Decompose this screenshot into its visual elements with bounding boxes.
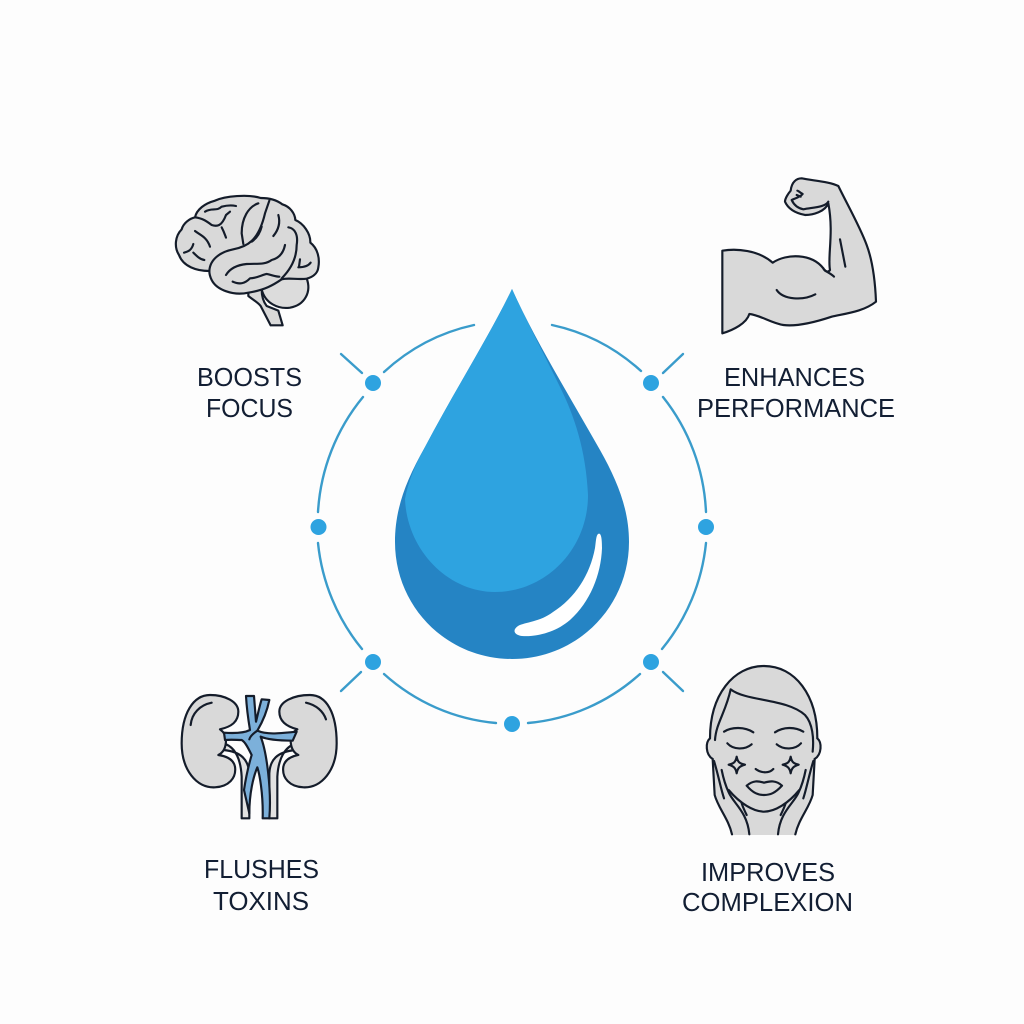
label: enhances performance: ENHANCES bbox=[724, 362, 865, 392]
label: boosts focus bbox=[197, 362, 302, 423]
label: improves complexion bbox=[682, 857, 853, 917]
icon: kidneys bbox=[182, 695, 337, 818]
icon: brain bbox=[176, 196, 319, 325]
label: flushes toxins bbox=[204, 854, 319, 916]
icon: water drop bbox=[395, 289, 629, 659]
label: enhances performance: PERFORMANCE bbox=[697, 393, 895, 423]
icon: flexed arm bbox=[722, 178, 876, 333]
label: improves complexion: IMPROVES bbox=[701, 857, 835, 887]
label: enhances performance bbox=[697, 362, 895, 423]
label: boosts focus: BOOSTS bbox=[197, 362, 302, 392]
icon: face with hands bbox=[707, 666, 821, 835]
label: flushes toxins: TOXINS bbox=[213, 886, 309, 916]
label: improves complexion: COMPLEXION bbox=[682, 887, 853, 917]
label: flushes toxins: FLUSHES bbox=[204, 854, 319, 884]
ring: segmented circle with dots bbox=[310, 325, 714, 732]
label: boosts focus: FOCUS bbox=[206, 393, 293, 423]
